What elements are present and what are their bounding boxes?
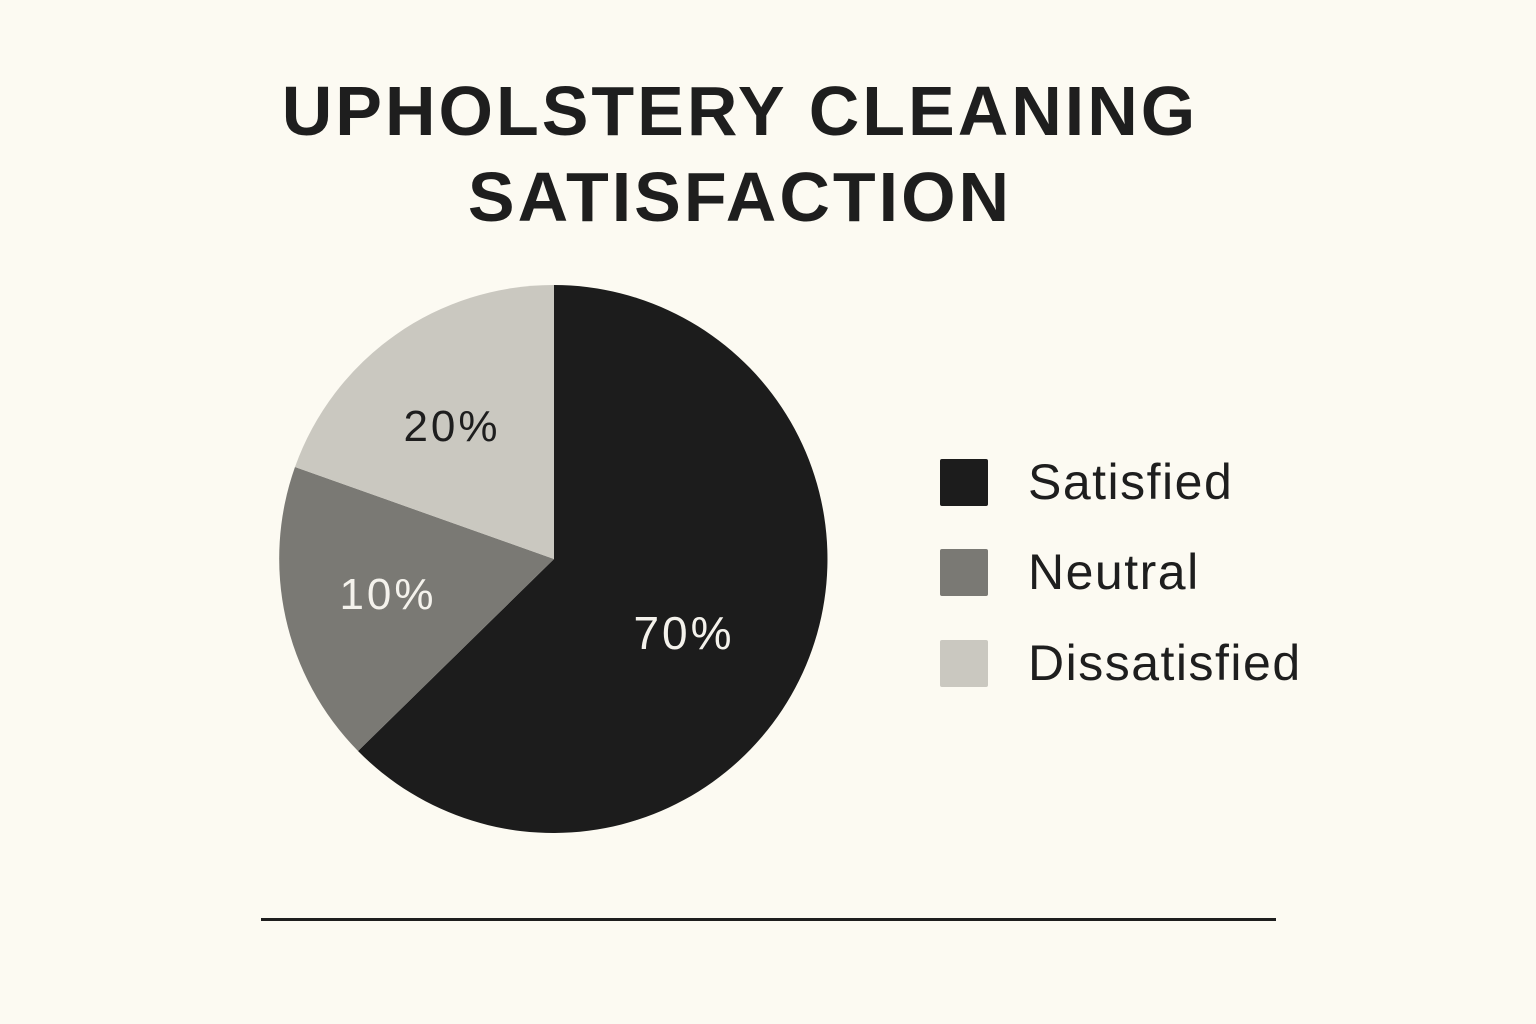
slice: dissatisfied [295,285,554,559]
label 10%: 10% [339,570,437,619]
slice: satisfied [358,285,827,833]
legend: dissatisfied: Dissatisfied [1028,635,1302,691]
legend: satisfied [940,454,1233,510]
label 70%: 70% [633,607,735,659]
title [282,72,1198,236]
legend [940,454,1302,691]
legend: satisfied: Satisfied [1028,454,1233,510]
legend: neutral [940,544,1200,600]
legend: neutral: Neutral [1028,544,1200,600]
title: UPHOLSTERY CLEANING [282,72,1198,150]
slice: neutral [279,467,554,751]
title: SATISFACTION [468,158,1012,236]
label 20%: 20% [403,402,501,451]
